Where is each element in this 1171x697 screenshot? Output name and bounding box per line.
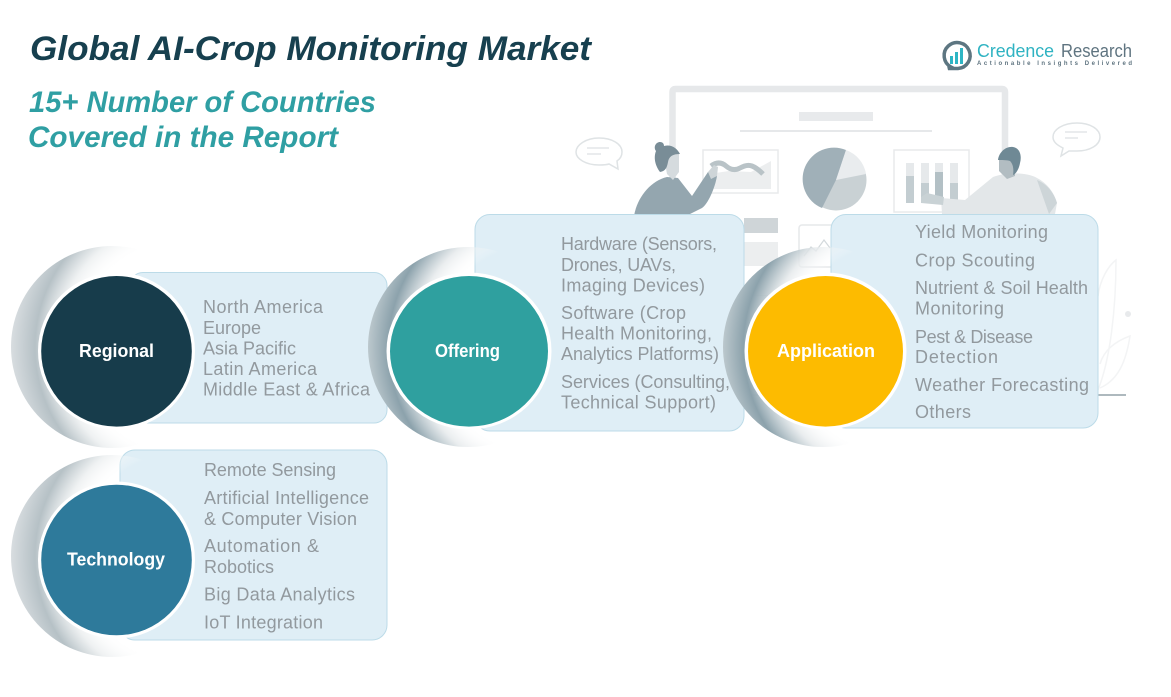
segment: Application <box>723 214 1098 447</box>
list: offerings: Drones, UAVs, <box>561 255 676 275</box>
list: offerings: Hardware (Sensors, <box>561 234 717 254</box>
list: regions: Latin America <box>203 359 318 379</box>
crescent: offering <box>368 247 568 447</box>
list: applications: Monitoring <box>915 298 1004 318</box>
logo: Credence Research: Research <box>1061 41 1132 61</box>
list: technologies: Big Data Analytics <box>204 584 355 604</box>
faint leaves <box>1098 260 1131 390</box>
list: offerings: Services (Consulting, <box>561 372 730 392</box>
panel: technology list background <box>120 450 387 640</box>
list: regions: North America <box>203 297 324 317</box>
bar chart card <box>894 150 969 212</box>
list: technologies: Artificial Intelligence <box>204 488 369 508</box>
circle: offering: Offering <box>435 341 500 361</box>
list: technologies <box>204 460 369 632</box>
list: applications: Pest & Disease <box>915 327 1033 347</box>
list: offerings: Technical Support) <box>561 392 716 412</box>
woman presenter <box>634 142 718 222</box>
list: regions: Europe <box>203 318 261 338</box>
list: applications: Detection <box>915 347 998 367</box>
segment: Regional <box>11 246 387 448</box>
circle: offering <box>386 272 552 430</box>
speech bubble right <box>1053 123 1100 156</box>
list: applications: Yield Monitoring <box>915 222 1048 242</box>
background illustration: presentation board and two people <box>576 89 1131 396</box>
list: technologies: IoT Integration <box>204 612 323 632</box>
panel: application list background <box>831 214 1098 428</box>
list: applications <box>915 222 1089 422</box>
crescent: application <box>723 247 923 447</box>
circle: regional: Regional <box>79 341 154 361</box>
logo: Credence Research <box>944 41 1132 68</box>
list: regions: Middle East & Africa <box>203 380 371 400</box>
list: regions <box>203 297 371 400</box>
segment: Technology <box>11 450 387 657</box>
list: applications: Nutrient & Soil Health <box>915 278 1088 298</box>
presentation board frame <box>672 89 1005 214</box>
list: offerings: Health Monitoring, <box>561 324 712 344</box>
list: offerings: Analytics Platforms) <box>561 344 719 364</box>
list: offerings: Imaging Devices) <box>561 276 705 296</box>
list: technologies: & Computer Vision <box>204 509 357 529</box>
logo: Credence Research: Actionable Insights Delivered <box>977 61 1132 67</box>
list: regions: Asia Pacific <box>203 338 296 358</box>
crescent: regional <box>11 246 213 448</box>
icon: logo bar chart <box>944 43 970 68</box>
list: technologies: Remote Sensing <box>204 460 336 480</box>
circle: technology <box>38 482 195 638</box>
list: applications: Others <box>915 402 971 422</box>
title: Global AI-Crop Monitoring Market <box>30 30 593 68</box>
list: offerings <box>561 234 730 412</box>
crescent: technology <box>11 455 213 657</box>
speech bubble left <box>576 138 622 169</box>
list: technologies: Automation & <box>204 536 319 556</box>
subtitle: 15+ Number of Countries <box>29 86 376 119</box>
circle: regional <box>38 272 195 430</box>
lower board blocks <box>744 218 839 296</box>
list: offerings: Software (Crop <box>561 303 686 323</box>
floor line <box>744 394 1126 396</box>
circle: application: Application <box>777 341 875 361</box>
list: applications: Weather Forecasting <box>915 375 1089 395</box>
segment: Offering <box>368 214 744 447</box>
list: applications: Crop Scouting <box>915 250 1035 270</box>
circle: application <box>744 272 906 430</box>
man presenter <box>921 147 1057 214</box>
circle: technology: Technology <box>67 550 165 570</box>
pie chart <box>803 148 866 210</box>
subtitle <box>28 86 376 154</box>
panel: regional list background <box>130 272 387 423</box>
logo: Credence Research: Credence <box>977 41 1054 61</box>
list: technologies: Robotics <box>204 557 274 577</box>
subtitle: Covered in the Report <box>28 121 340 154</box>
panel: offering list background <box>475 214 744 431</box>
line chart card <box>703 150 778 193</box>
